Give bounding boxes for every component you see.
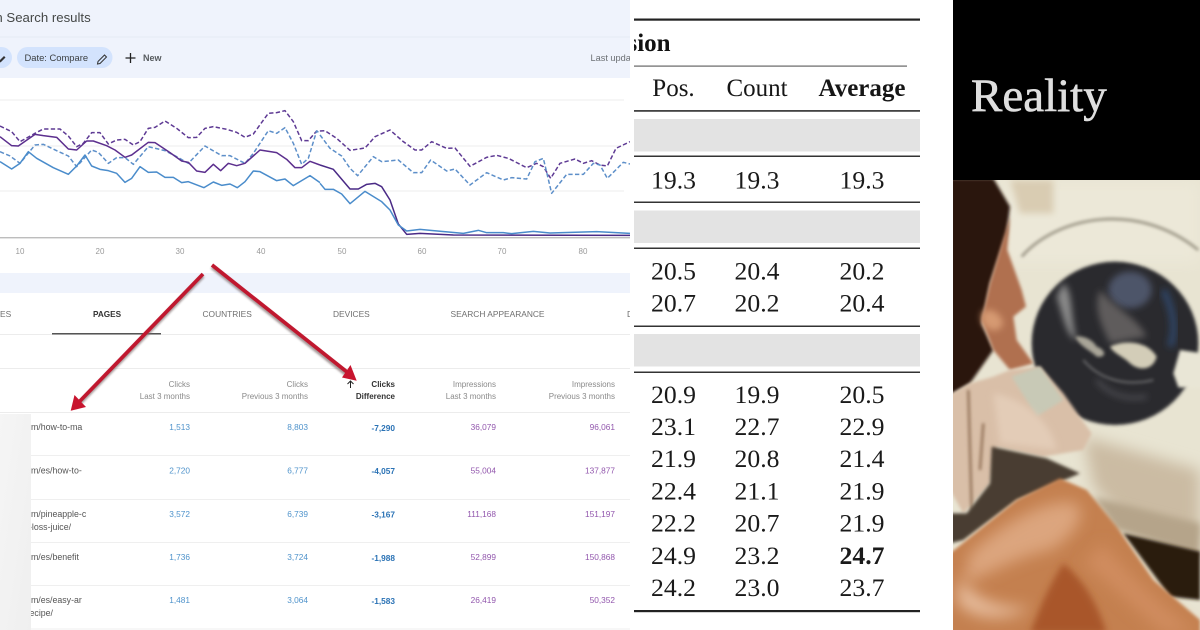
redacted block	[0, 414, 31, 630]
table header row: Clicks	[169, 380, 190, 389]
table values: 20.5	[840, 380, 884, 409]
table values: 20.8	[735, 444, 779, 473]
clicks previous 3 months: 8,803	[287, 422, 308, 432]
clicks last 3 months: 2,720	[169, 466, 190, 476]
column headers	[652, 80, 905, 102]
table values: 23.1	[651, 412, 696, 441]
table values: 21.4	[840, 444, 885, 473]
table values: 21.9	[840, 476, 884, 506]
page urls: com/es/how-to-	[22, 466, 82, 476]
clicks previous 3 months: 6,739	[287, 509, 308, 519]
table values: 20.7	[735, 508, 780, 538]
new filter button	[126, 53, 163, 63]
table values: 20.9	[651, 380, 696, 409]
table values	[651, 166, 885, 602]
chart x axis labels: 30	[176, 247, 185, 256]
photo: woman at washing machine	[950, 177, 1200, 630]
impressions previous 3 months: 137,877	[585, 466, 615, 476]
column headers: Count	[726, 75, 788, 102]
table values: 20.4	[735, 256, 780, 286]
tabs: DEVICES	[333, 309, 370, 319]
face	[982, 217, 1033, 370]
chart x axis labels: 60	[418, 247, 427, 256]
table values: 20.2	[735, 288, 779, 318]
table values: 20.4	[840, 288, 885, 318]
page urls: com/es/easy-ar	[22, 595, 82, 605]
table values: 24.2	[651, 573, 696, 602]
knee and thigh	[950, 478, 1200, 630]
table group heading: sion	[628, 30, 671, 57]
clicks difference	[371, 423, 395, 606]
clicks previous 3 months: 6,777	[287, 466, 308, 476]
table values: 22.9	[840, 412, 884, 441]
washer door handle	[1173, 350, 1200, 388]
clicks last 3 months: 1,513	[169, 422, 190, 432]
page urls: recipe/	[27, 608, 54, 618]
filter chip: date compare: Date: Compare	[24, 52, 88, 63]
table header row: Previous 3 months	[549, 392, 615, 401]
clicks difference: -4,057	[371, 466, 395, 476]
tabs: SEARCH APPEARANCE	[450, 309, 545, 319]
table values: 20.2	[840, 256, 884, 286]
table values: 22.2	[651, 508, 696, 538]
filter chip: partial	[0, 47, 12, 68]
new filter button: New	[143, 53, 163, 63]
table values: 19.3	[840, 166, 884, 195]
impressions last 3 months: 26,419	[471, 595, 496, 605]
clicks difference: -1,583	[371, 596, 395, 606]
chart x axis labels: 80	[579, 247, 588, 256]
page urls: com/pineapple-c	[22, 509, 87, 519]
tabs: D	[627, 309, 633, 319]
clicks previous 3 months: 3,064	[287, 595, 308, 605]
impressions previous 3 months	[585, 422, 615, 605]
tabs: COUNTRIES	[202, 309, 252, 319]
impressions last 3 months: 55,004	[471, 466, 496, 476]
table header row: Previous 3 months	[242, 392, 308, 401]
chart x axis labels: 20	[96, 247, 105, 256]
table values: 19.3	[735, 166, 779, 195]
tabs: ES	[0, 309, 12, 319]
panel: search console screenshot	[0, 0, 644, 630]
chart x axis labels: 10	[16, 247, 25, 256]
page urls	[31, 424, 86, 618]
dark under-leg area	[1123, 533, 1200, 600]
chart x axis labels	[16, 248, 588, 254]
table values: 20.5	[651, 256, 696, 286]
clicks last 3 months: 1,481	[169, 595, 190, 605]
caption: reality: Reality	[971, 70, 1107, 122]
black caption bar	[953, 0, 1200, 180]
column headers: Pos.	[652, 75, 695, 102]
clicks difference: -1,988	[371, 553, 395, 563]
table values: 22.4	[651, 476, 696, 506]
table header row: Clicks	[371, 380, 396, 389]
clicks last 3 months	[169, 422, 190, 605]
table rows	[0, 422, 630, 629]
impressions previous 3 months: 96,061	[590, 422, 615, 432]
hair	[950, 178, 1010, 395]
clicks difference: -3,167	[371, 510, 395, 520]
table values: 20.7	[651, 288, 696, 318]
filter chip: date compare	[17, 47, 112, 68]
clicks previous 3 months: 3,724	[287, 552, 308, 562]
table values: 22.7	[735, 412, 780, 441]
arrow: to clicks difference	[212, 265, 357, 381]
clicks last 3 months: 1,736	[169, 552, 190, 562]
arrow: to page urls	[71, 274, 203, 411]
shirt	[950, 367, 1092, 513]
panel: reality meme	[950, 0, 1200, 630]
impressions previous 3 months: 50,352	[590, 595, 615, 605]
chart x axis labels: 70	[498, 247, 507, 256]
table values: 24.7	[840, 541, 885, 570]
separator band	[0, 273, 630, 293]
page urls: com/how-to-ma	[22, 422, 82, 432]
tabs	[0, 309, 633, 335]
washer drum	[1032, 262, 1198, 425]
table header row	[0, 368, 630, 413]
line chart	[0, 100, 630, 256]
impressions previous 3 months: 150,868	[585, 552, 615, 562]
table header row: Difference	[356, 392, 396, 401]
series: clicks previous dashed	[0, 111, 630, 235]
table values: 21.9	[651, 444, 696, 473]
table values: 23.0	[735, 573, 779, 602]
header band	[0, 0, 630, 78]
table values: 19.3	[651, 166, 696, 195]
table values: 21.9	[840, 508, 884, 538]
washer door ring	[1022, 219, 1198, 257]
last updated label: Last updated	[590, 53, 644, 63]
table values: 23.7	[840, 573, 885, 602]
washer shadow	[1083, 437, 1200, 543]
tabs: PAGES	[93, 310, 122, 319]
page urls: -loss-juice/	[29, 522, 72, 532]
column headers: Average	[818, 75, 906, 102]
table values: 21.1	[735, 476, 779, 506]
clicks last 3 months: 3,572	[169, 509, 190, 519]
impressions last 3 months: 36,079	[471, 422, 496, 432]
table header row: Last 3 months	[140, 392, 190, 401]
impressions last 3 months: 111,168	[467, 509, 496, 519]
table header row: Impressions	[453, 380, 496, 389]
impressions last 3 months: 52,899	[471, 552, 496, 562]
table rules	[634, 18, 920, 612]
impressions last 3 months	[467, 422, 496, 605]
dark clothing	[950, 447, 1080, 543]
page urls: com/es/benefit	[22, 552, 79, 562]
shaded section rows	[634, 119, 920, 366]
table values: 24.9	[651, 541, 696, 570]
table header row: Last 3 months	[446, 392, 496, 401]
chart x axis labels: 40	[257, 247, 266, 256]
chart x axis labels: 50	[338, 247, 347, 256]
table header row: Impressions	[572, 380, 615, 389]
panel: position table	[634, 18, 920, 612]
impressions previous 3 months: 151,197	[585, 509, 615, 519]
clicks difference: -7,290	[371, 423, 395, 433]
table header row: Clicks	[287, 380, 308, 389]
clicks previous 3 months	[287, 422, 308, 605]
table values: 23.2	[735, 541, 779, 570]
table values: 19.9	[735, 380, 779, 409]
